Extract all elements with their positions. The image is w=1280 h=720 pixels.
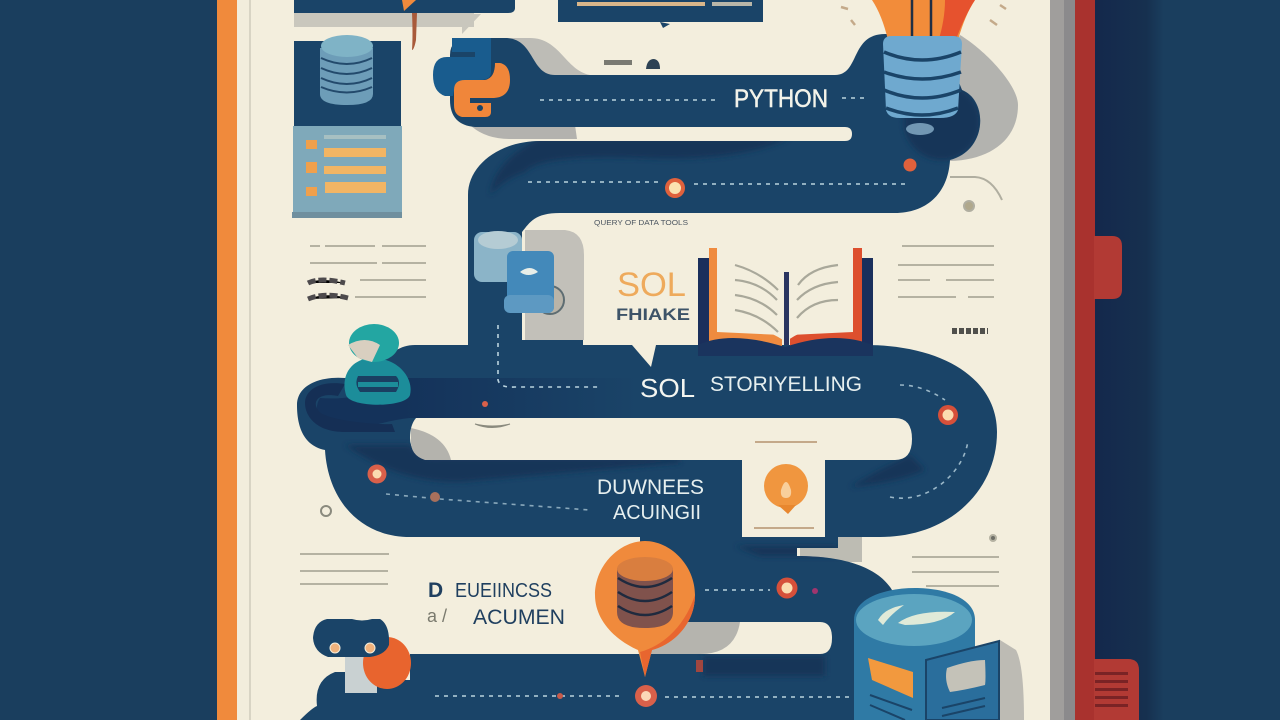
right text lines — [898, 246, 994, 331]
loop cut-out — [305, 383, 395, 432]
heading: acumen: ACUINGII — [613, 502, 701, 524]
caption strip: QUERY OF DATA TOOLS — [594, 220, 688, 227]
database panel — [292, 35, 402, 218]
heading: business acumen dark — [427, 579, 565, 629]
icon: bracket note — [950, 177, 1002, 211]
icon: python logo — [433, 38, 510, 117]
icon: large database and report — [854, 588, 999, 720]
heading: storytelling: STORIYELLING — [710, 373, 862, 396]
top centre banner — [558, 0, 763, 28]
heading: business acumen dark: a / — [427, 606, 447, 626]
heading: sql orange: SOL — [617, 266, 686, 304]
list rows — [306, 135, 386, 196]
infographic canvas — [217, 0, 1154, 720]
icon: database cards — [474, 231, 564, 314]
small mark — [321, 506, 331, 516]
heading: sql: SOL — [640, 373, 695, 403]
book page frame — [217, 0, 1095, 720]
label: python: PYTHON — [734, 85, 828, 113]
top left banner — [294, 0, 515, 50]
heading: business acumen dark: ACUMEN — [473, 606, 565, 629]
icon: light bulb — [841, 0, 1006, 135]
small red mark — [696, 660, 703, 672]
right notes — [912, 535, 999, 586]
left text lines — [308, 246, 426, 299]
icon: flame card — [742, 459, 825, 537]
icon: robot — [300, 619, 412, 720]
left notes — [300, 554, 389, 584]
heading: business acumen dark: EUEIINCSS — [455, 580, 552, 602]
route nodes — [368, 158, 958, 707]
road: lower lanes — [410, 537, 892, 720]
icon: open book — [698, 247, 873, 356]
icon: database stack — [320, 35, 373, 105]
road dark shading — [317, 84, 980, 676]
icon: teal figure — [344, 324, 411, 405]
shadows under road — [470, 35, 1024, 720]
label: fhiake: FHIAKE — [616, 305, 690, 324]
road dotted routes — [386, 98, 968, 697]
heading: business acumen dark: D — [428, 579, 443, 602]
icon: orange pin — [595, 541, 695, 677]
road: python and upper lanes — [297, 34, 997, 548]
small caption dots — [604, 59, 660, 69]
heading: business: DUWNEES — [597, 476, 704, 499]
road islands — [410, 418, 912, 654]
red tabs — [1094, 236, 1139, 720]
speech tail — [632, 345, 656, 367]
